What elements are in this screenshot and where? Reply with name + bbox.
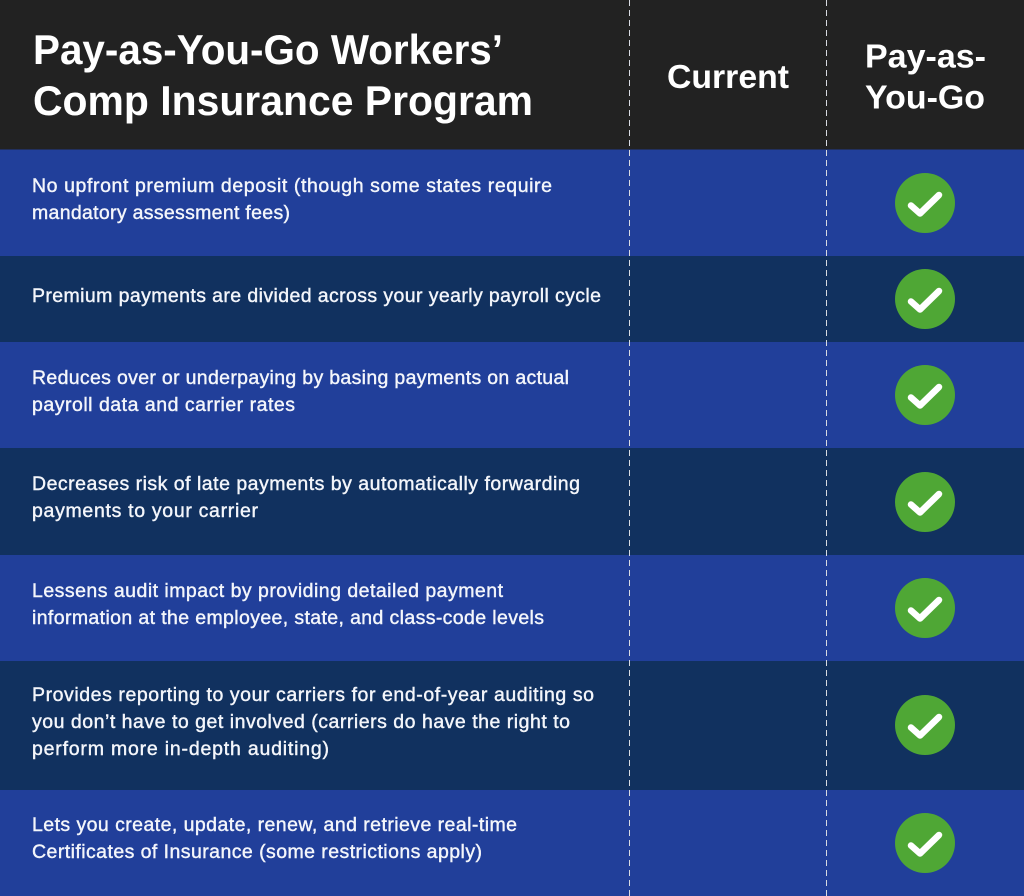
row 1 background [0, 150, 1024, 256]
title [33, 26, 533, 124]
row 6 background [0, 661, 1024, 790]
column heading: Pay-as-You-Go: You-Go [865, 78, 985, 116]
row 2 background [0, 256, 1024, 342]
row 4 text: payments to your carrier [32, 500, 258, 522]
row 5 text [32, 580, 544, 629]
header band [0, 0, 1024, 150]
row 7 text: Lets you create, update, renew, and retrieve real-time [32, 814, 517, 836]
row 1 text [32, 175, 552, 224]
row 6 text: you don’t have to get involved (carriers do have the right to [32, 711, 570, 733]
icon: check row 5 [895, 578, 955, 638]
column heading: Pay-as-You-Go [865, 38, 986, 116]
row 4 text: Decreases risk of late payments by automatically forwarding [32, 473, 580, 495]
icon: check row 1 [895, 173, 955, 233]
icon: check row 2 [895, 269, 955, 329]
row 4 background [0, 448, 1024, 555]
title: Pay-as-You-Go Workers’ [33, 26, 503, 73]
row 5 background [0, 555, 1024, 661]
row 7 background [0, 790, 1024, 896]
row 2 text: Premium payments are divided across your yearly payroll cycle [32, 285, 601, 307]
row 3 text: payroll data and carrier rates [32, 394, 295, 416]
icon: check row 3 [895, 365, 955, 425]
row 6 text [32, 684, 594, 760]
row 7 text [32, 814, 517, 863]
row 3 text [32, 367, 569, 416]
icon: check row 7 [895, 813, 955, 873]
icon: check row 4 [895, 472, 955, 532]
row 3 text: Reduces over or underpaying by basing payments on actual [32, 367, 569, 389]
title: Comp Insurance Program [33, 77, 533, 124]
row 6 text: Provides reporting to your carriers for end-of-year auditing so [32, 684, 594, 706]
column heading: Pay-as-You-Go: Pay-as- [865, 38, 986, 74]
column heading: Current: Current [667, 58, 789, 95]
row 5 text: Lessens audit impact by providing detailed payment [32, 580, 504, 602]
icon: check row 6 [895, 695, 955, 755]
row 5 text: information at the employee, state, and class-code levels [32, 607, 544, 629]
row 3 background [0, 342, 1024, 448]
row 4 text [32, 473, 580, 522]
row 6 text: perform more in-depth auditing) [32, 738, 329, 760]
row 1 text: mandatory assessment fees) [32, 202, 290, 224]
row 1 text: No upfront premium deposit (though some states require [32, 175, 552, 197]
row 7 text: Certificates of Insurance (some restrictions apply) [32, 841, 482, 863]
